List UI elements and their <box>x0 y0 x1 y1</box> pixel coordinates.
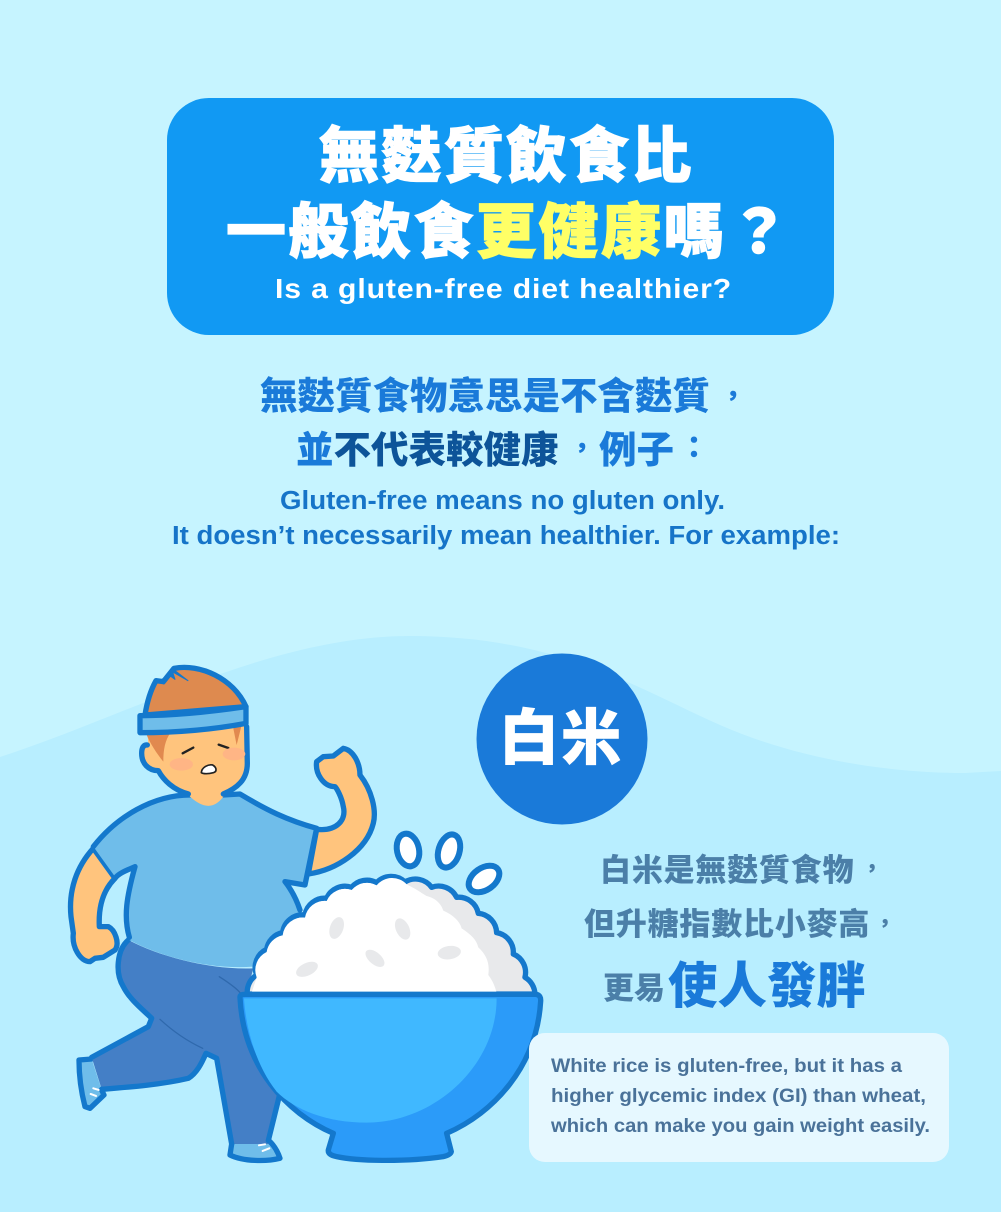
title english: Is a gluten-free diet healthier? <box>275 273 732 304</box>
rice grains in the air <box>394 832 504 898</box>
illustration: man running <box>71 667 374 1160</box>
rice description <box>584 853 897 1014</box>
english note panel <box>529 1033 949 1162</box>
title panel <box>167 98 834 335</box>
description line 3: 使人發胖 <box>668 959 866 1014</box>
intro english 2: It doesn’t necessarily mean healthier. For example: <box>172 522 840 550</box>
description line 1: ， <box>861 856 884 881</box>
right arm <box>308 748 374 874</box>
intro line 2: 例子 <box>599 429 674 471</box>
description line 1: 白米是無麩質食物 <box>600 853 854 888</box>
illustration: rice bowl <box>240 876 541 1160</box>
left arm <box>71 848 117 962</box>
intro line 2: ： <box>679 432 709 465</box>
headband <box>140 707 246 733</box>
intro line 2: 並不代表較健康 <box>296 429 558 471</box>
note line 3: which can make you gain weight easily. <box>550 1115 930 1137</box>
background wave <box>0 636 1001 1212</box>
white rice badge <box>476 654 648 824</box>
description line 2: ， <box>874 911 897 936</box>
intro english 1: Gluten-free means no gluten only. <box>280 487 725 515</box>
intro line 1: ， <box>720 381 746 411</box>
badge label: 白米 <box>499 705 623 772</box>
hair <box>145 667 246 715</box>
intro line 1: 無麩質食物意思是不含麩質 <box>260 375 710 417</box>
note line 2: higher glycemic index (GI) than wheat, <box>551 1085 926 1107</box>
man: pants and shoes <box>79 940 282 1160</box>
description line 2: 但升糖指數比小麥高 <box>584 907 870 942</box>
face <box>183 745 228 753</box>
bowl <box>240 994 541 1160</box>
title line 1: 無麩質飲食比 <box>319 123 694 190</box>
head <box>141 725 247 806</box>
intro line 2: ， <box>569 433 595 463</box>
man: upper body <box>71 667 374 967</box>
intro text <box>172 375 840 550</box>
rice <box>247 876 535 994</box>
description line 3: 更易 <box>603 971 665 1006</box>
note line 1: White rice is gluten-free, but it has a <box>551 1055 902 1077</box>
title line 2: 一般飲食更健康嗎？ <box>226 199 792 266</box>
shirt <box>93 794 317 967</box>
